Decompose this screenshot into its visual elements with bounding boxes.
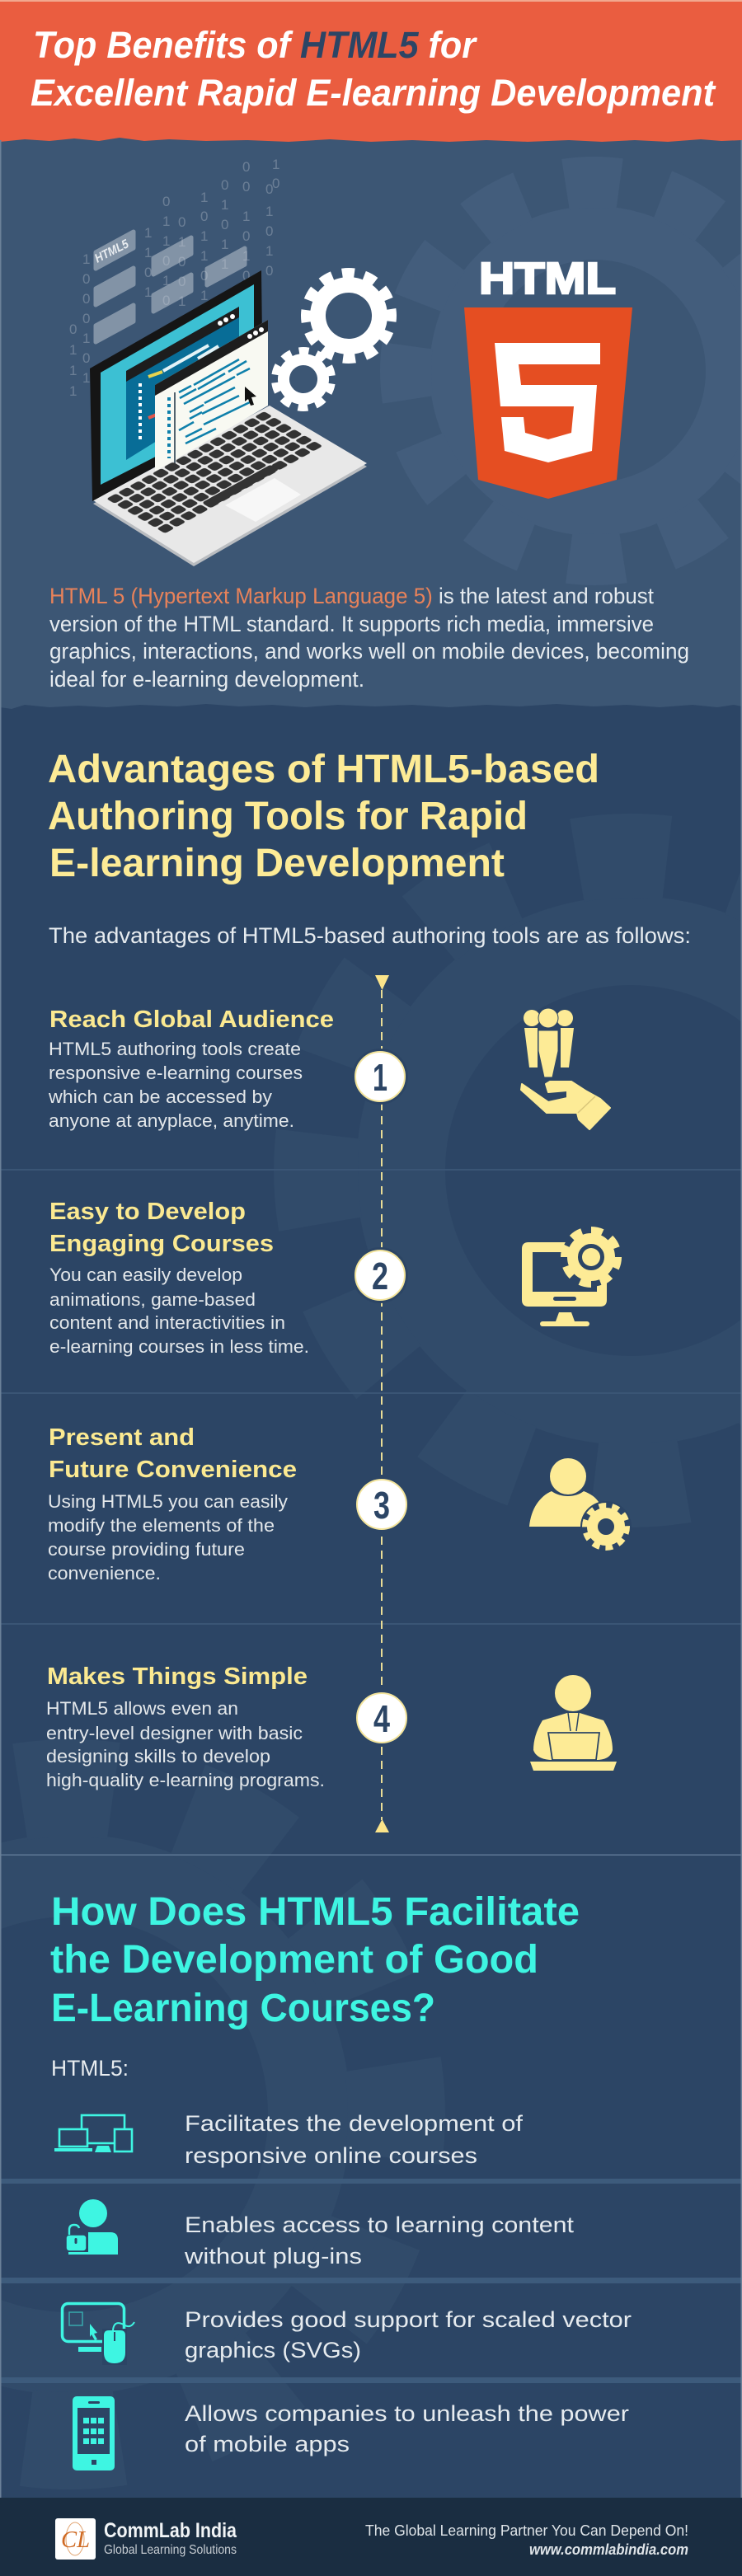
item 4 text xyxy=(46,1698,325,1790)
icon: person with open lock xyxy=(66,2199,118,2255)
item 1: reach global audience xyxy=(48,1006,610,1131)
icon: devices xyxy=(54,2115,132,2152)
benefit 4 text xyxy=(185,2401,629,2456)
subheading: HTML5: HTML5: xyxy=(51,2056,129,2081)
item 2 title: Easy to Develop xyxy=(49,1199,246,1225)
back window xyxy=(126,307,239,460)
title: Excellent Rapid E-learning Development xyxy=(31,72,716,114)
item 2 text xyxy=(49,1265,309,1357)
binary digits: 01011 xyxy=(221,177,228,272)
background gear: top right xyxy=(381,157,742,584)
benefit 2 text: Enables access to learning content xyxy=(185,2212,575,2237)
tile label: HTML5 xyxy=(92,237,132,266)
intro text: graphics, interactions, and works well on mobile devices, becoming xyxy=(49,639,689,664)
benefit 3: scaled vector graphics xyxy=(63,2303,632,2365)
heading: how does HTML5 facilitate xyxy=(50,1890,580,2030)
logo wordmark: HTML xyxy=(479,254,616,303)
icon: small white gear xyxy=(270,346,336,412)
logo numeral five xyxy=(495,343,600,462)
footer brand: CommLab India xyxy=(104,2519,237,2542)
item 1 text: which can be accessed by xyxy=(48,1086,272,1107)
heading: how does HTML5 facilitate: E-Learning Courses? xyxy=(51,1987,435,2030)
number badge 2: 2 xyxy=(372,1255,388,1297)
trackpad xyxy=(225,478,301,522)
item 3 text: convenience. xyxy=(48,1563,161,1584)
footer tagline: The Global Learning Partner You Can Depend On! xyxy=(365,2522,688,2539)
item 4 text: entry-level designer with basic xyxy=(46,1723,303,1743)
footer tagline: www.commlabindia.com xyxy=(529,2541,688,2558)
panel: advantages background xyxy=(0,704,742,1855)
benefit 4 text: Allows companies to unleash the power xyxy=(185,2401,629,2426)
number badge 4: 4 xyxy=(373,1697,390,1740)
item 4 text: HTML5 allows even an xyxy=(46,1698,238,1719)
number badge 2 xyxy=(352,1247,408,1303)
item 3 text: Using HTML5 you can easily xyxy=(48,1491,288,1512)
intro text: HTML 5 (Hypertext Markup Language 5) is the latest and robust xyxy=(49,584,655,608)
intro text: version of the HTML standard. It supports rich media, immersive xyxy=(49,612,654,636)
binary digits: 01010 xyxy=(265,181,273,279)
binary digits: 1101 xyxy=(144,225,152,300)
number badge 3: 3 xyxy=(373,1484,390,1527)
timeline xyxy=(375,975,389,1832)
mouse cursor xyxy=(245,387,256,406)
item 2 title xyxy=(49,1199,274,1257)
dividers xyxy=(0,1169,742,1625)
background gear: bottom left xyxy=(0,1746,439,2483)
intro text: ideal for e-learning development. xyxy=(49,667,364,692)
benefit 1 text: Facilitates the development of xyxy=(185,2111,524,2136)
benefit 3 text: graphics (SVGs) xyxy=(185,2338,361,2363)
footer logo xyxy=(55,2518,96,2560)
item 4 title: Makes Things Simple xyxy=(47,1663,308,1690)
item 3 title: Present and xyxy=(49,1424,195,1451)
top arrow xyxy=(375,975,389,990)
item 1 title: Reach Global Audience xyxy=(49,1006,334,1033)
panel: intro background xyxy=(0,0,742,717)
item 2 text: e-learning courses in less time. xyxy=(49,1336,309,1357)
background gear: middle right xyxy=(270,810,742,1531)
benefit 1 text xyxy=(185,2111,524,2168)
number badge 1: 1 xyxy=(373,1056,387,1099)
item 3 title xyxy=(49,1424,297,1483)
footer tagline xyxy=(365,2522,688,2558)
footer brand: Global Learning Solutions xyxy=(104,2543,237,2557)
logo shield xyxy=(464,307,632,499)
item 3 text: modify the elements of the xyxy=(48,1515,275,1536)
number badge 3 xyxy=(354,1476,410,1532)
item 1 text: responsive e-learning courses xyxy=(49,1063,303,1083)
title xyxy=(31,24,716,114)
benefit 4 text: of mobile apps xyxy=(185,2432,350,2456)
laptop screen bezel xyxy=(90,270,263,501)
heading: advantages: E-learning Development xyxy=(49,842,505,885)
item 2 title: Engaging Courses xyxy=(49,1231,274,1257)
section divider line xyxy=(0,1855,742,1856)
icon: laptop xyxy=(90,270,367,566)
number badge 4 xyxy=(354,1690,410,1746)
benefit 3 text: Provides good support for scaled vector xyxy=(185,2307,632,2332)
benefit 2 text: without plug-ins xyxy=(184,2244,362,2269)
panel: how does HTML5 facilitate background xyxy=(0,1855,742,2498)
icon: monitor with gear xyxy=(522,1227,621,1326)
binary digits xyxy=(69,157,279,399)
benefit 2: no plug-ins xyxy=(66,2199,575,2269)
binary digits: 01001 xyxy=(178,214,186,309)
icon: large white gear xyxy=(300,267,397,364)
item 3: present and future convenience xyxy=(48,1424,632,1584)
HTML5 logo xyxy=(464,254,632,499)
item 1 text xyxy=(48,1039,303,1131)
benefit 2 text xyxy=(184,2212,575,2269)
benefit 1 text: responsive online courses xyxy=(185,2143,477,2168)
heading: how does HTML5 facilitate: How Does HTML5 Facilitate xyxy=(51,1890,580,1934)
binary digits: 0111 xyxy=(69,321,77,399)
item 3 text xyxy=(48,1491,288,1584)
laptop base xyxy=(93,406,367,566)
icon: people over hand xyxy=(521,1008,610,1129)
code tiles xyxy=(96,232,245,342)
item 1 text: anyone at anyplace, anytime. xyxy=(49,1110,294,1131)
divider bars xyxy=(0,2179,742,2383)
number badge 1 xyxy=(352,1049,408,1105)
heading: advantages xyxy=(48,748,599,885)
item 4 text: designing skills to develop xyxy=(46,1746,270,1767)
item 2: easy to develop xyxy=(49,1199,621,1357)
icon: person at laptop xyxy=(530,1675,617,1771)
subheading: The advantages of HTML5-based authoring tools are as follows: xyxy=(49,923,691,948)
binary digits: 1011010 xyxy=(200,190,208,323)
binary digits: 001010 xyxy=(242,159,250,284)
footer brand xyxy=(104,2519,237,2557)
panel: header banner xyxy=(0,0,742,142)
keyboard xyxy=(105,410,325,534)
icon: smartphone xyxy=(73,2396,115,2470)
item 4: makes things simple xyxy=(46,1663,617,1790)
item 2 text: animations, game-based xyxy=(49,1289,256,1310)
item 3 title: Future Convenience xyxy=(49,1457,297,1483)
binary digits: 011010 xyxy=(162,194,170,308)
item 3 text: course providing future xyxy=(48,1539,245,1560)
binary digits: 10 xyxy=(272,157,279,191)
intro text xyxy=(49,584,689,692)
heading: how does HTML5 facilitate: the Development of Good xyxy=(50,1938,538,1982)
icon: person with gear xyxy=(529,1458,632,1552)
benefit 3 text xyxy=(185,2307,632,2363)
bottom arrow xyxy=(375,1819,389,1832)
heading: advantages: Authoring Tools for Rapid xyxy=(48,795,528,838)
title: Top Benefits of HTML5 for xyxy=(33,24,477,66)
panel: footer xyxy=(0,2498,742,2576)
icon: monitor and mouse xyxy=(63,2303,134,2365)
heading: advantages: Advantages of HTML5-based xyxy=(48,748,599,791)
binary digits: 1000101 xyxy=(82,251,90,386)
item 2 text: content and interactivities in xyxy=(49,1312,285,1333)
item 1 text: HTML5 authoring tools create xyxy=(49,1039,301,1059)
item 4 text: high-quality e-learning programs. xyxy=(46,1770,325,1790)
item 2 text: You can easily develop xyxy=(49,1265,242,1285)
front code window xyxy=(155,320,268,472)
benefit 1: responsive courses xyxy=(54,2111,524,2168)
laptop cyan screen xyxy=(101,284,254,485)
footer logo: CL xyxy=(61,2527,90,2553)
benefit 4: mobile apps xyxy=(73,2396,629,2470)
